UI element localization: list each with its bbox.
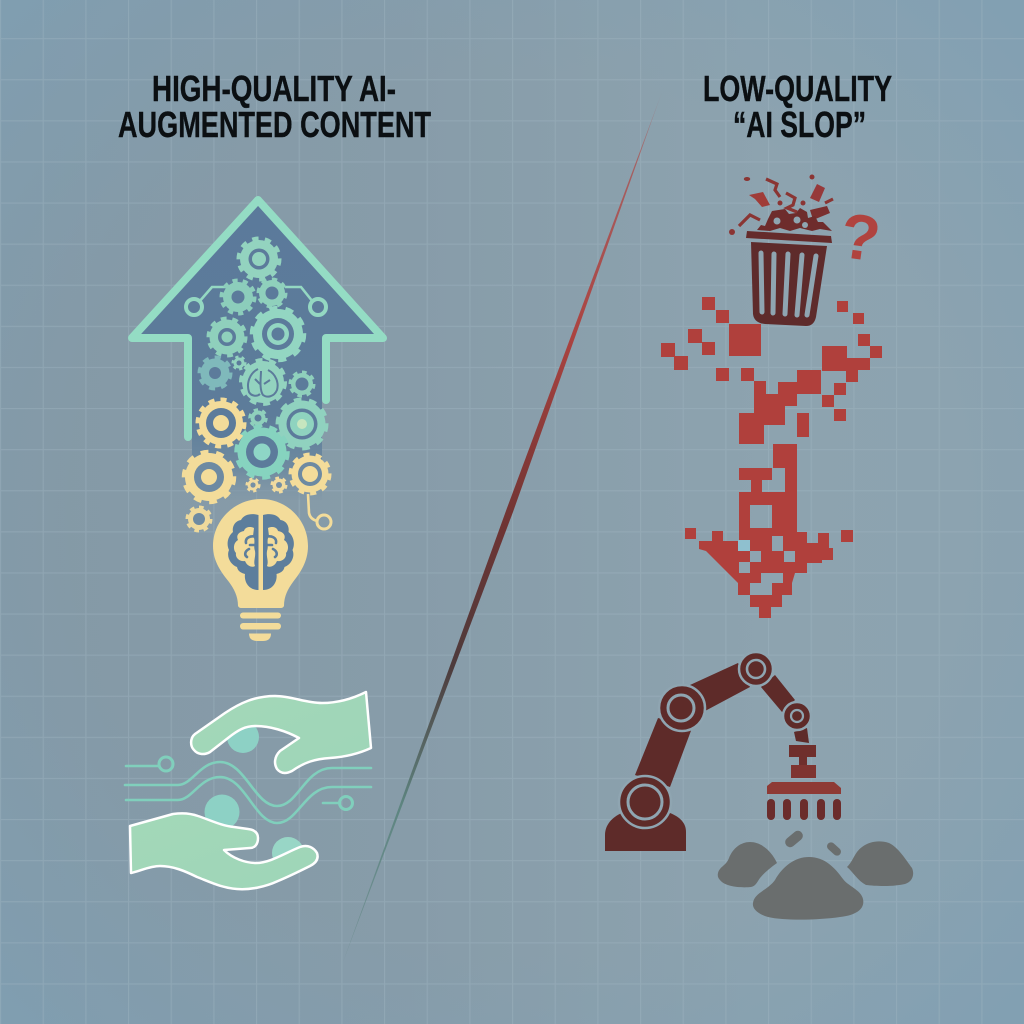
top hand <box>191 692 371 773</box>
heading: high-quality: AUGMENTED CONTENT <box>118 104 431 145</box>
joints <box>619 652 811 828</box>
icon: brain swirl <box>248 369 278 397</box>
gripper <box>767 745 841 820</box>
yellow gears <box>184 400 331 530</box>
brain <box>228 514 294 590</box>
icon: slop piles <box>718 829 913 920</box>
heading: low-quality: LOW-QUALITY <box>703 68 892 109</box>
central diagonal divider <box>343 92 662 962</box>
lid <box>746 231 832 243</box>
mint gears <box>200 239 326 477</box>
data streams <box>125 757 371 823</box>
arrow outline <box>132 200 383 437</box>
heading: low-quality <box>703 68 892 145</box>
heading: low-quality: “AI SLOP” <box>733 104 866 145</box>
circuit traces <box>186 287 326 315</box>
orbs <box>204 721 304 869</box>
heading: high-quality <box>118 68 431 145</box>
icon: collaborating hands <box>125 692 371 889</box>
icon: lightbulb with brain <box>213 499 308 641</box>
icon: pixelated falling arrow <box>661 297 882 618</box>
bottom hand <box>130 813 318 889</box>
icon: question mark: ? <box>836 199 885 276</box>
robot base <box>605 813 686 851</box>
heading: high-quality: HIGH-QUALITY AI- <box>152 68 396 109</box>
icon: upward arrow with gears <box>132 200 383 530</box>
bulb base <box>240 612 281 641</box>
can body <box>751 242 827 326</box>
arm segments <box>635 718 692 787</box>
circuit node <box>308 494 331 529</box>
icon: robotic arm <box>605 652 841 851</box>
debris <box>729 174 833 235</box>
icon: overflowing trash can <box>729 174 833 326</box>
